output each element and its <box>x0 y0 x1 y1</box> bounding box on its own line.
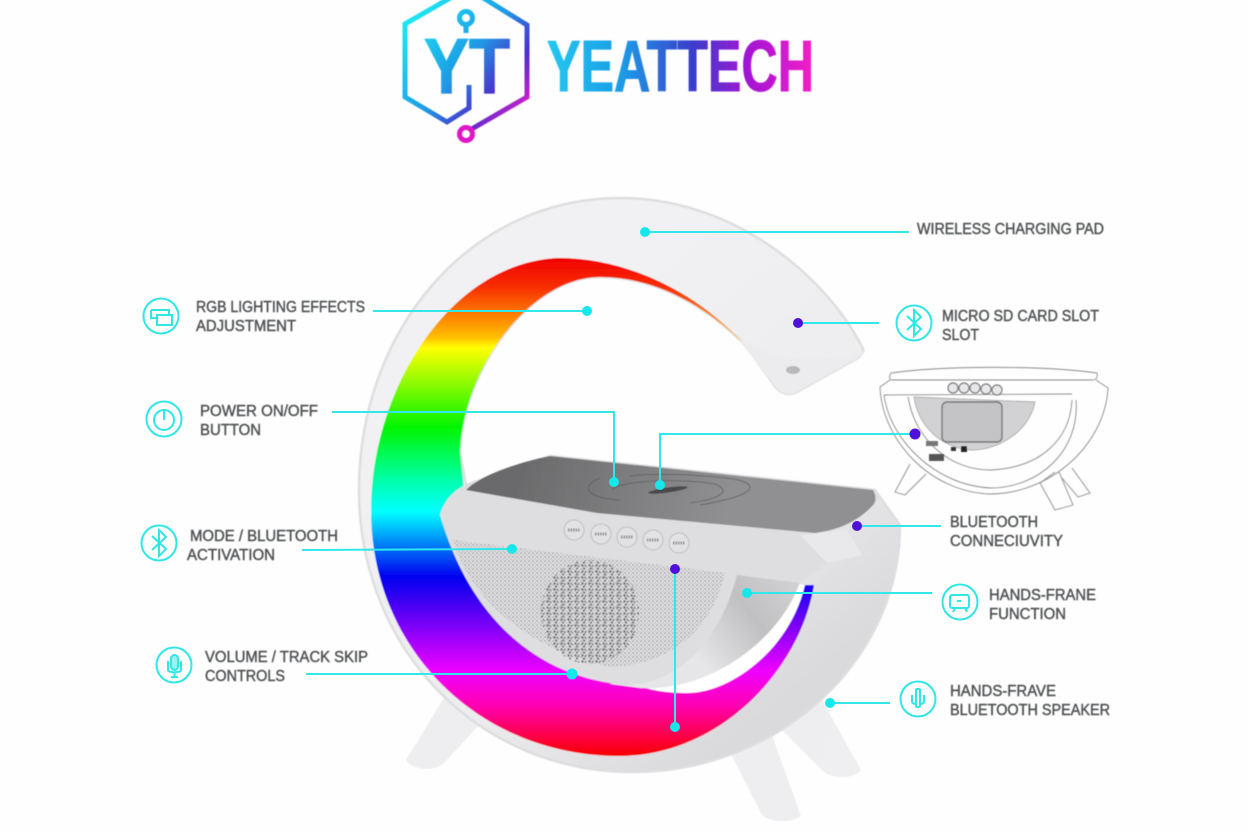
line: micro SD <box>798 322 879 324</box>
line: hands-free function <box>747 592 932 594</box>
line: grille to band <box>674 569 676 727</box>
rear view body <box>880 380 1108 494</box>
icon: power <box>146 402 182 436</box>
icon: microphone right <box>900 682 936 716</box>
rear view speaker window <box>942 402 1002 442</box>
legs <box>406 693 861 821</box>
front facet <box>800 530 862 563</box>
logo <box>405 0 814 140</box>
callout lines <box>302 232 941 727</box>
speaker grille <box>453 540 725 667</box>
rainbow light band <box>371 258 814 756</box>
speaker front <box>440 456 880 685</box>
rear view lid <box>890 367 1097 380</box>
label: wireless charging: WIRELESS CHARGING PAD <box>917 221 1104 238</box>
line drawing: rear view <box>880 367 1108 510</box>
wireless charging top <box>466 456 875 533</box>
charging rings <box>588 474 750 505</box>
line: bluetooth connectivity <box>857 525 941 527</box>
logo wordmark: YEATTECH <box>547 27 814 107</box>
line: hands-free speaker <box>830 702 890 704</box>
line: wireless charging pad <box>645 231 909 233</box>
control buttons <box>564 520 689 553</box>
label: power <box>200 403 318 439</box>
logo hexagon icon <box>405 0 527 140</box>
label: micro SD: MICRO SD CARD SLOT <box>942 308 1099 325</box>
main product: G lamp speaker <box>359 198 900 821</box>
rear view buttons <box>948 383 1002 395</box>
cap port <box>786 366 800 374</box>
rear view ports <box>926 441 967 461</box>
label: mode <box>187 528 338 564</box>
speaker cone perforation <box>541 560 639 664</box>
icon: microphone left <box>156 648 192 682</box>
label: RGB lighting <box>196 299 365 335</box>
label: mode: ACTIVATION <box>187 547 275 564</box>
label: RGB lighting: RGB LIGHTING EFFECTS <box>196 299 365 316</box>
label: RGB lighting: ADJUSTMENT <box>196 318 296 335</box>
rear view feet <box>895 464 1090 510</box>
line: RGB lighting <box>373 310 587 312</box>
line: volume controls <box>306 673 572 675</box>
label: hands-frane <box>989 587 1096 623</box>
label: micro SD: SLOT <box>942 327 979 344</box>
label: hands-frave: HANDS-FRAVE <box>950 683 1056 700</box>
icon: RGB layers <box>144 298 178 334</box>
labels <box>187 221 1110 719</box>
icon: hands-free display <box>942 584 978 620</box>
label: power: BUTTON <box>200 422 261 439</box>
charging centre mark <box>648 485 688 495</box>
line: power button <box>332 412 614 482</box>
icon: bluetooth right <box>896 306 932 340</box>
label: bluetooth connectivity: CONNECIUVITY <box>950 533 1063 550</box>
line: mode bluetooth <box>302 549 512 550</box>
label: hands-frave: BLUETOOTH SPEAKER <box>950 702 1110 719</box>
ring top cap facet <box>738 339 863 394</box>
label: bluetooth connectivity: BLUETOOTH <box>950 514 1038 531</box>
label: micro SD <box>942 308 1099 344</box>
ring shell <box>359 198 900 772</box>
label: volume <box>205 649 368 685</box>
label: volume: VOLUME / TRACK SKIP <box>205 649 368 666</box>
label: bluetooth connectivity <box>950 514 1063 550</box>
speaker body <box>440 456 880 688</box>
under-speaker opening <box>640 575 805 693</box>
label: power: POWER ON/OFF <box>200 403 318 420</box>
icon: bluetooth left <box>142 526 176 560</box>
line: rear port <box>660 434 915 485</box>
label: hands-frane: FUNCTION <box>989 606 1066 623</box>
speaker rear shading <box>610 574 800 688</box>
label: mode: MODE / BLUETOOTH <box>190 528 338 545</box>
label: hands-frave <box>950 683 1110 719</box>
label: hands-frane: HANDS-FRANE <box>989 587 1096 604</box>
callout dots <box>507 227 920 732</box>
button glyphs <box>568 530 685 543</box>
logo monogram: YT <box>424 22 510 110</box>
label: volume: CONTROLS <box>205 668 285 685</box>
rear view grille <box>914 397 1035 450</box>
